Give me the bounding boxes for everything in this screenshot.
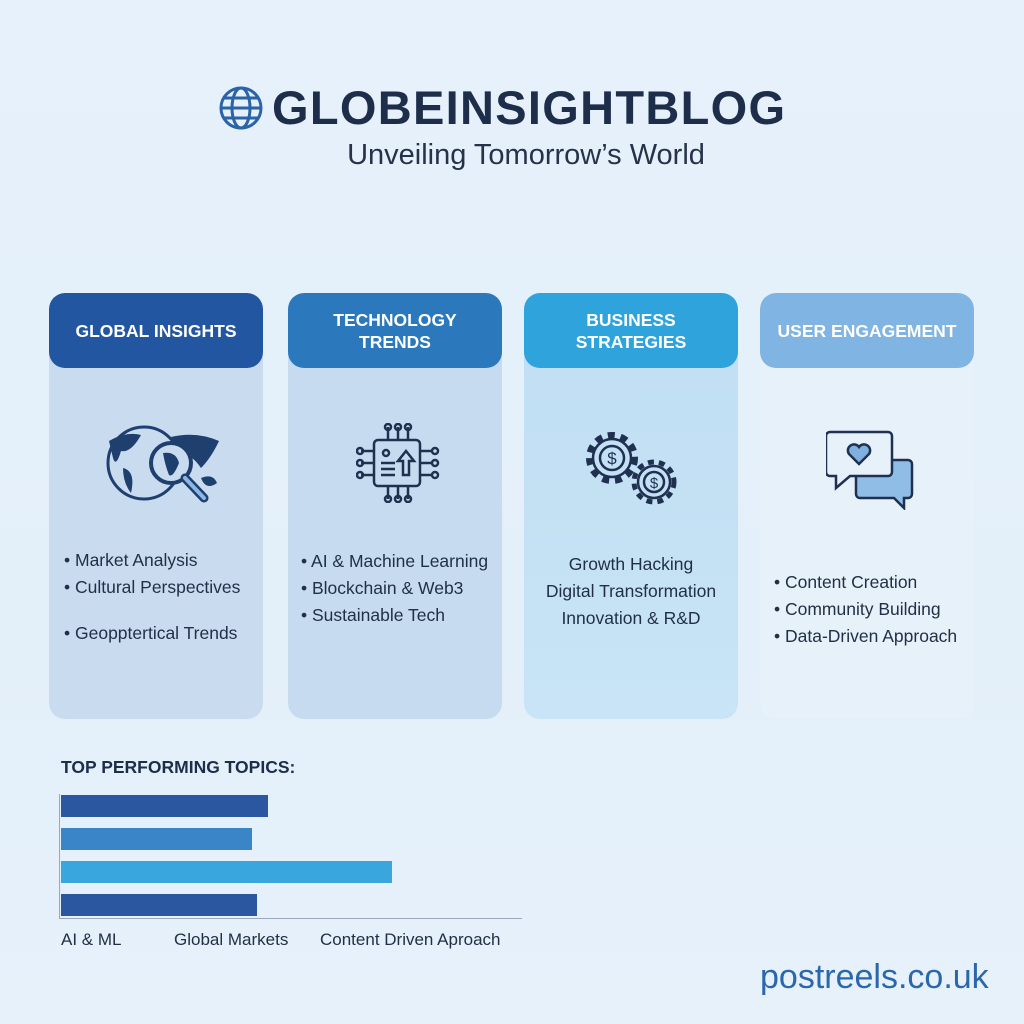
list: business strategies: Innovation & R&D xyxy=(561,608,701,628)
bar chart: AI & ML xyxy=(61,930,121,949)
icon: globe with magnifier xyxy=(106,426,219,502)
list: global insights: • Geopptertical Trends xyxy=(64,623,237,643)
list: technology trends xyxy=(301,551,488,625)
list: user engagement: • Community Building xyxy=(774,599,941,619)
heading: business strategies: BUSINESS xyxy=(586,310,676,330)
title: GLOBEINSIGHTBLOG xyxy=(272,81,786,134)
bar chart: Content Driven Aproach xyxy=(320,930,500,949)
icon: gears: $ xyxy=(607,449,617,468)
heading: technology trends xyxy=(288,293,502,368)
panel: technology trends xyxy=(288,293,502,719)
list: user engagement: • Data-Driven Approach xyxy=(774,626,957,646)
icon: globe xyxy=(220,86,262,130)
bar chart xyxy=(59,794,522,949)
icon: gears: $ xyxy=(650,475,659,492)
list: global insights xyxy=(64,550,240,643)
panel: global insights xyxy=(49,293,263,719)
list: technology trends: • AI & Machine Learning xyxy=(301,551,488,571)
heading: global insights: GLOBAL INSIGHTS xyxy=(75,320,237,340)
heading: business strategies: STRATEGIES xyxy=(576,332,686,352)
heading: user engagement xyxy=(760,293,974,368)
chart heading: TOP PERFORMING TOPICS: xyxy=(61,757,295,777)
panel: business strategies xyxy=(524,293,738,719)
icon: chat hearts xyxy=(826,430,914,510)
bar chart: Global Markets xyxy=(174,930,288,949)
heading: technology trends: TRENDS xyxy=(359,332,431,352)
list: business strategies: Digital Transformation xyxy=(546,581,716,601)
list: user engagement xyxy=(774,572,957,646)
list: business strategies: Growth Hacking xyxy=(569,554,693,574)
list: technology trends: • Blockchain & Web3 xyxy=(301,578,463,598)
heading: global insights xyxy=(49,293,263,368)
panel: user engagement xyxy=(760,293,974,719)
subtitle: Unveiling Tomorrow’s World xyxy=(347,139,705,171)
heading: user engagement: USER ENGAGEMENT xyxy=(778,320,956,340)
heading: technology trends: TECHNOLOGY xyxy=(333,310,457,330)
list: global insights: • Market Analysis xyxy=(64,550,198,570)
list: business strategies xyxy=(546,554,716,628)
list: user engagement: • Content Creation xyxy=(774,572,917,592)
list: global insights: • Cultural Perspectives xyxy=(64,577,240,597)
heading: business strategies xyxy=(524,293,738,368)
footer url: postreels.co.uk xyxy=(760,958,989,996)
list: technology trends: • Sustainable Tech xyxy=(301,605,445,625)
icon: gears xyxy=(586,432,676,504)
icon: chip xyxy=(356,423,440,503)
